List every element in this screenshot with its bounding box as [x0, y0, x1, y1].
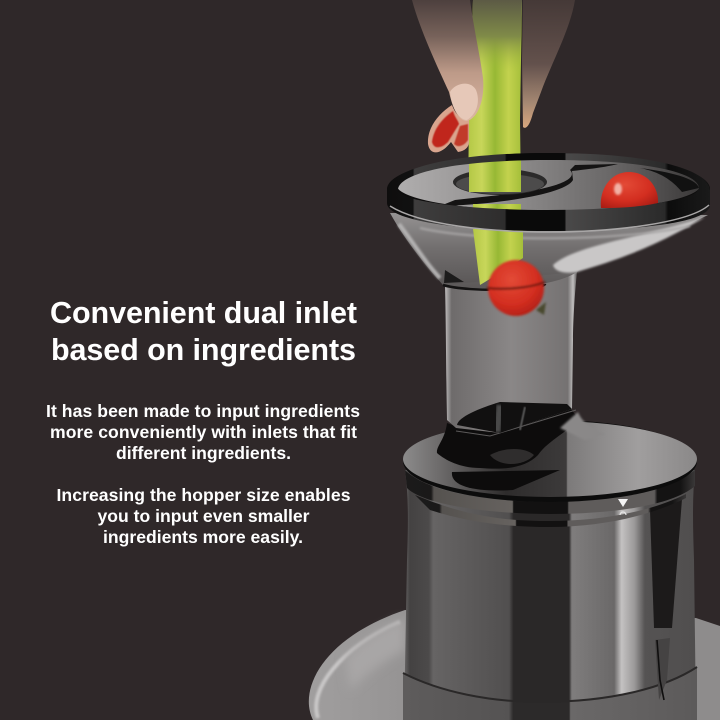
tomato falling through funnel	[487, 260, 546, 316]
hand holding celery	[412, 0, 575, 152]
description paragraph one: It has been made to input ingredients	[46, 401, 360, 421]
curled fingers	[428, 105, 469, 152]
heading: Convenient dual inlet	[50, 296, 357, 330]
body lower ring	[403, 667, 697, 720]
celery stick	[468, 0, 522, 210]
fingernail	[450, 84, 478, 120]
inlet divider	[440, 164, 618, 206]
funnel top disc	[387, 153, 710, 232]
inner lower ring	[443, 284, 545, 290]
heading: based on ingredients	[51, 333, 356, 367]
funnel hopper bowl	[390, 213, 708, 290]
funnel neck	[445, 272, 577, 433]
juicer body with window and markers	[403, 470, 697, 720]
band	[405, 470, 695, 514]
thumb	[522, 0, 575, 128]
description paragraph two: ingredients more easily.	[103, 527, 303, 547]
base plate of juicer	[309, 610, 720, 720]
description paragraph one: more conveniently with inlets that fit	[50, 422, 357, 442]
outer rim ring	[387, 153, 710, 231]
celery seen through funnel	[473, 229, 523, 285]
index finger	[412, 0, 483, 121]
heading	[50, 296, 357, 367]
tomato on the rim	[601, 172, 658, 208]
description paragraph two: Increasing the hopper size enables	[56, 485, 351, 505]
juicer lid	[403, 420, 697, 502]
alignment circle	[620, 512, 626, 515]
description paragraph two: you to input even smaller	[98, 506, 310, 526]
alignment triangle	[618, 499, 628, 507]
description paragraph one	[46, 401, 360, 463]
dark side window	[650, 499, 682, 628]
description paragraph two	[56, 485, 351, 547]
description paragraph one: different ingredients.	[116, 443, 291, 463]
dark crescent inside rim	[640, 168, 699, 192]
small round inlet	[453, 169, 547, 195]
chute collar	[437, 408, 606, 469]
celery through the inlet	[469, 160, 521, 192]
